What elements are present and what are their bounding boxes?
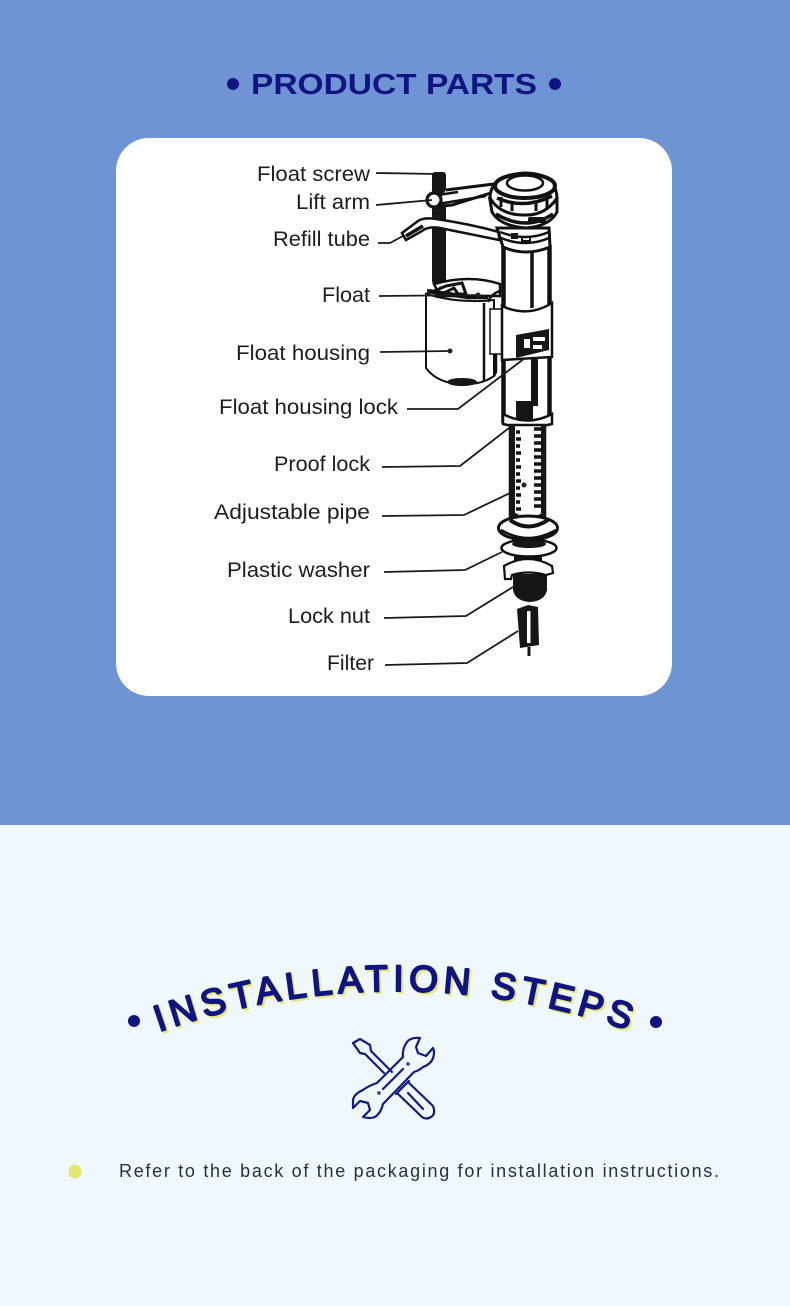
flange <box>498 516 558 545</box>
diagram: fill valve <box>376 172 558 665</box>
label: plastic washer: Plastic washer <box>227 559 370 582</box>
valve head <box>490 173 557 252</box>
label: filter: Filter <box>327 652 374 675</box>
label: lift arm: Lift arm <box>296 191 370 214</box>
float screw rod <box>432 172 446 284</box>
proof lock <box>503 401 552 427</box>
bullet marker <box>68 1164 82 1178</box>
heading: product parts: PRODUCT PARTS <box>251 69 537 101</box>
heading: installation steps: INSTALLATION STEPS <box>158 966 636 1034</box>
float housing <box>426 279 504 386</box>
label: adjustable pipe: Adjustable pipe <box>214 501 370 524</box>
label: float housing: Float housing <box>236 342 370 365</box>
collar with housing lock <box>502 303 552 360</box>
text: installation instructions: Refer to the back of the packaging for installation instructions. <box>119 1161 719 1181</box>
filter <box>517 605 539 656</box>
label: float: Float <box>322 284 370 307</box>
refill tube <box>402 218 499 240</box>
lock nut <box>504 559 553 602</box>
leader lines <box>376 173 526 665</box>
label: float housing lock: Float housing lock <box>219 396 399 419</box>
label: proof lock: Proof lock <box>274 453 371 476</box>
label: float screw: Float screw <box>257 163 371 186</box>
label: lock nut: Lock nut <box>288 605 370 628</box>
heading: installation steps: INSTALLATION STEPS <box>153 964 634 1032</box>
panel: installation steps background <box>0 825 790 1306</box>
plastic washer <box>502 540 556 565</box>
adjustable pipe <box>510 425 546 519</box>
label: refill tube: Refill tube <box>273 228 370 251</box>
main upper tube <box>503 245 550 423</box>
lift arm <box>427 184 494 207</box>
panel: parts diagram card <box>116 138 672 696</box>
icon: crossed screwdriver and wrench <box>353 1038 434 1118</box>
part labels <box>214 163 399 675</box>
panel: product parts background <box>0 0 790 825</box>
